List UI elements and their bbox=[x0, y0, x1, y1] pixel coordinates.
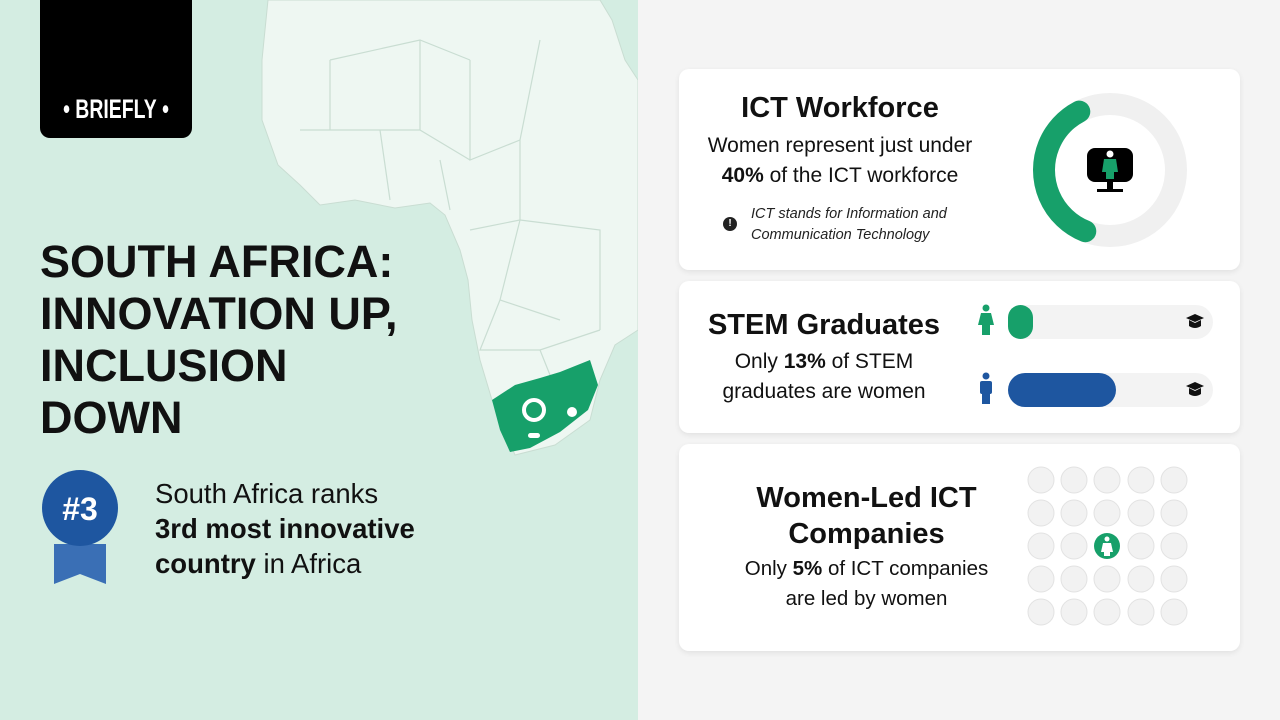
panel: ICT workforce bbox=[679, 69, 1240, 270]
text: rank statement bbox=[155, 478, 415, 579]
logo: Briefly bbox=[40, 0, 192, 138]
text: STEM stat bbox=[722, 350, 926, 403]
map: Africa bbox=[262, 0, 638, 456]
heading: Women-Led ICT Companies: Women-Led ICT bbox=[756, 482, 977, 514]
heading: Women-Led ICT Companies bbox=[756, 482, 977, 550]
panel: women-led ICT companies bbox=[679, 444, 1240, 651]
chart: women bar 13% bbox=[978, 304, 1213, 339]
chart: men bar bbox=[980, 372, 1213, 407]
icon: rank medal #3: #3 bbox=[62, 491, 98, 527]
chart: 5x5 dot grid bbox=[1028, 466, 1188, 626]
text: ICT stat bbox=[708, 134, 972, 187]
title: DOWN bbox=[40, 392, 182, 443]
icon: rank medal #3 bbox=[42, 470, 118, 584]
note: ICT definition: ICT stands for Information and Communication Technology bbox=[751, 206, 947, 243]
left panel background with map bbox=[0, 0, 638, 720]
chart: donut 40% bbox=[1033, 93, 1187, 247]
text: companies stat: are led by women bbox=[786, 587, 947, 610]
text: ICT stat: 40% of the ICT workforce bbox=[722, 164, 958, 187]
note: ICT definition: ! bbox=[728, 218, 732, 229]
text: STEM stat: graduates are women bbox=[722, 380, 926, 403]
panel: STEM graduates bbox=[679, 281, 1240, 433]
title: SOUTH AFRICA: bbox=[40, 236, 393, 287]
heading: ICT Workforce: ICT Workforce bbox=[741, 92, 939, 124]
text: STEM stat: Only 13% of STEM bbox=[735, 350, 913, 373]
text: companies stat bbox=[745, 557, 988, 610]
map: South Africa highlight bbox=[492, 360, 598, 452]
heading: STEM Graduates: STEM Graduates bbox=[708, 309, 940, 341]
logo: Briefly: • BRIEFLY • bbox=[63, 94, 169, 124]
heading: Women-Led ICT Companies: Companies bbox=[788, 518, 945, 550]
title bbox=[40, 236, 398, 443]
text: rank statement: South Africa ranks bbox=[155, 478, 378, 509]
text: rank statement: 3rd most innovative country in Africa bbox=[155, 513, 415, 579]
title: INCLUSION bbox=[40, 340, 288, 391]
text: companies stat: Only 5% of ICT companies bbox=[745, 557, 988, 580]
title: INNOVATION UP, bbox=[40, 288, 398, 339]
text: ICT stat: Women represent just under bbox=[708, 134, 972, 157]
